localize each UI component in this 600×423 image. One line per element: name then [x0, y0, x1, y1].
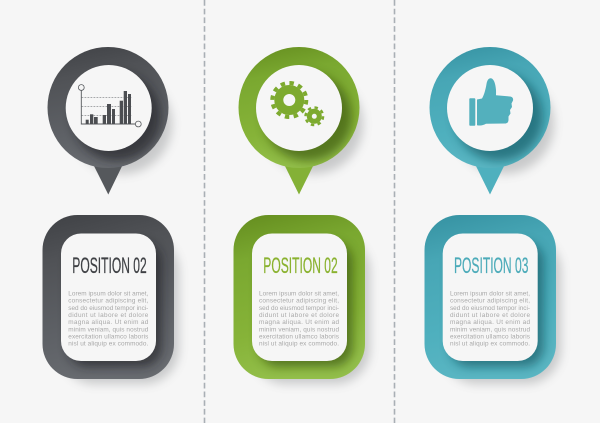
body text: sed do eiusmod tempor inci- [68, 305, 148, 312]
heading: POSITION 02 [263, 253, 338, 278]
card 2: position 02 green [234, 215, 370, 384]
body text: minim veniam, quis nostrud [259, 326, 339, 333]
body text: Lorem ipsum dolor sit amet, [68, 290, 149, 298]
icon: bar chart [78, 85, 141, 127]
pin 3: teal thumbs-up marker [430, 47, 554, 194]
body text: magna aliqua. Ut enim ad [68, 319, 149, 326]
body text: Lorem ipsum dolor sit amet, [259, 290, 339, 298]
heading: POSITION 02 [72, 253, 147, 278]
body text: Lorem ipsum dolor sit amet, [450, 290, 530, 298]
body text: nisl ut aliquip ex commodo. [68, 341, 149, 348]
body text: sed do eiusmod tempor inci- [259, 305, 339, 312]
body text [68, 290, 149, 348]
body text: didunt ut labore et dolore [68, 312, 149, 319]
body text: magna aliqua. Ut enim ad [450, 319, 530, 326]
body text: magna aliqua. Ut enim ad [259, 319, 339, 326]
body text: minim veniam, quis nostrud [68, 326, 149, 333]
body text: consectetur adipiscing elit, [450, 298, 530, 305]
body text: didunt ut labore et dolore [259, 312, 339, 319]
body text [259, 290, 339, 348]
card 1: position 02 grey [42, 215, 179, 384]
card 3: position 03 teal [424, 215, 561, 384]
body text: exercitation ullamco laboris [450, 334, 530, 340]
pin 1: grey chart marker [48, 47, 172, 194]
body text: exercitation ullamco laboris [68, 334, 148, 340]
body text: consectetur adipiscing elit, [259, 298, 339, 305]
body text: minim veniam, quis nostrud [450, 326, 530, 333]
body text: didunt ut labore et dolore [450, 312, 530, 319]
icon: thumbs up [469, 78, 513, 126]
body text: exercitation ullamco laboris [259, 334, 339, 340]
heading: POSITION 03 [454, 253, 528, 278]
body text: nisl ut aliquip ex commodo. [259, 341, 339, 348]
body text: sed do eiusmod tempor inci- [450, 305, 530, 312]
body text [450, 290, 530, 348]
body text: consectetur adipiscing elit, [68, 298, 149, 305]
icon: gears [272, 83, 323, 125]
body text: nisl ut aliquip ex commodo. [450, 341, 530, 348]
pin 2: green gears marker [238, 47, 363, 194]
